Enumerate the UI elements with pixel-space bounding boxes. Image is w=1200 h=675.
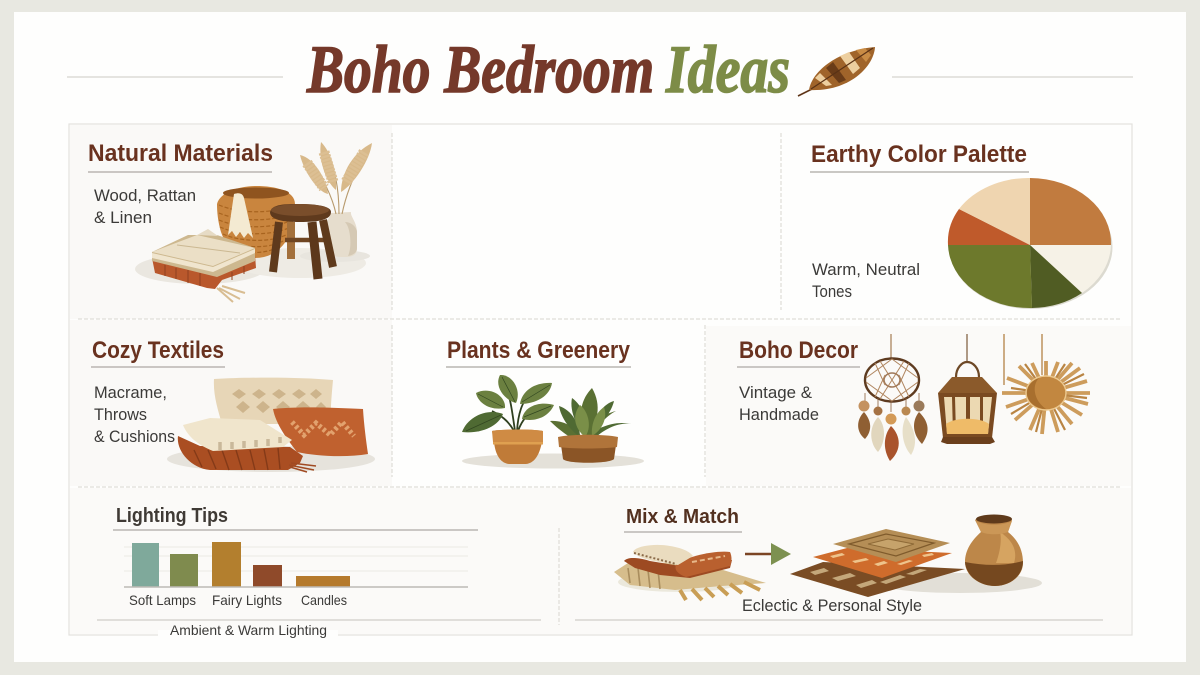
illustration: potted plants	[462, 375, 644, 468]
heading: earthy color palette: Earthy Color Palette	[811, 141, 1027, 168]
heading: natural materials: Natural Materials	[88, 140, 273, 167]
illustration: clay vase	[965, 514, 1023, 586]
illustration: basket stool blankets pampas	[135, 142, 372, 302]
panel: lighting tips	[97, 505, 541, 640]
illustration: stacked rugs	[790, 529, 1042, 597]
text: vintage handmade: Vintage &	[739, 383, 813, 402]
heading: cozy textiles: Cozy Textiles	[92, 337, 224, 364]
bar chart	[124, 542, 468, 608]
panel: mix and match	[575, 506, 1103, 620]
panel: plants and greenery	[446, 337, 644, 468]
text: wood rattan linen	[94, 186, 196, 227]
panel: cozy textiles	[91, 337, 375, 472]
text: warm neutral tones	[812, 260, 920, 301]
title: Ideas	[665, 31, 790, 107]
icon: sunburst mirror	[1002, 334, 1090, 434]
text: macrame throws cushions: Throws	[94, 405, 147, 424]
caption: eclectic personal style: Eclectic & Personal Style	[742, 596, 922, 615]
panel: earthy color palette	[810, 141, 1112, 309]
panel: natural materials	[88, 140, 372, 302]
caption: ambient and warm lighting: Ambient & Warm Lighting	[170, 622, 327, 638]
text: vintage handmade: Handmade	[739, 405, 819, 424]
title: Boho Bedroom	[306, 31, 654, 107]
icon: lantern	[938, 334, 997, 444]
bar chart: Fairy Lights	[212, 592, 282, 608]
text: macrame throws cushions: & Cushions	[94, 427, 175, 446]
heading: lighting tips: Lighting Tips	[116, 505, 228, 527]
heading: plants and greenery: Plants & Greenery	[447, 337, 631, 364]
text: wood rattan linen: & Linen	[94, 208, 152, 227]
text: vintage handmade	[739, 383, 819, 424]
illustration: cushions and throws	[167, 378, 375, 472]
text: wood rattan linen: Wood, Rattan	[94, 186, 196, 205]
icon: feather	[798, 47, 875, 96]
bar chart: Candles	[301, 592, 347, 608]
icon: dream catcher	[858, 334, 928, 461]
text: warm neutral tones: Warm, Neutral	[812, 260, 920, 279]
heading: mix and match: Mix & Match	[626, 506, 739, 528]
panel: boho decor	[737, 334, 1090, 461]
text: macrame throws cushions: Macrame,	[94, 383, 167, 402]
text: macrame throws cushions	[94, 383, 175, 446]
panel: main frame	[69, 124, 1132, 635]
text: warm neutral tones: Tones	[812, 282, 852, 301]
pie chart	[948, 178, 1112, 309]
arrow	[745, 543, 791, 565]
illustration: folded blankets	[614, 545, 766, 600]
heading: boho decor: Boho Decor	[739, 337, 858, 364]
bar chart: Soft Lamps	[129, 592, 196, 608]
